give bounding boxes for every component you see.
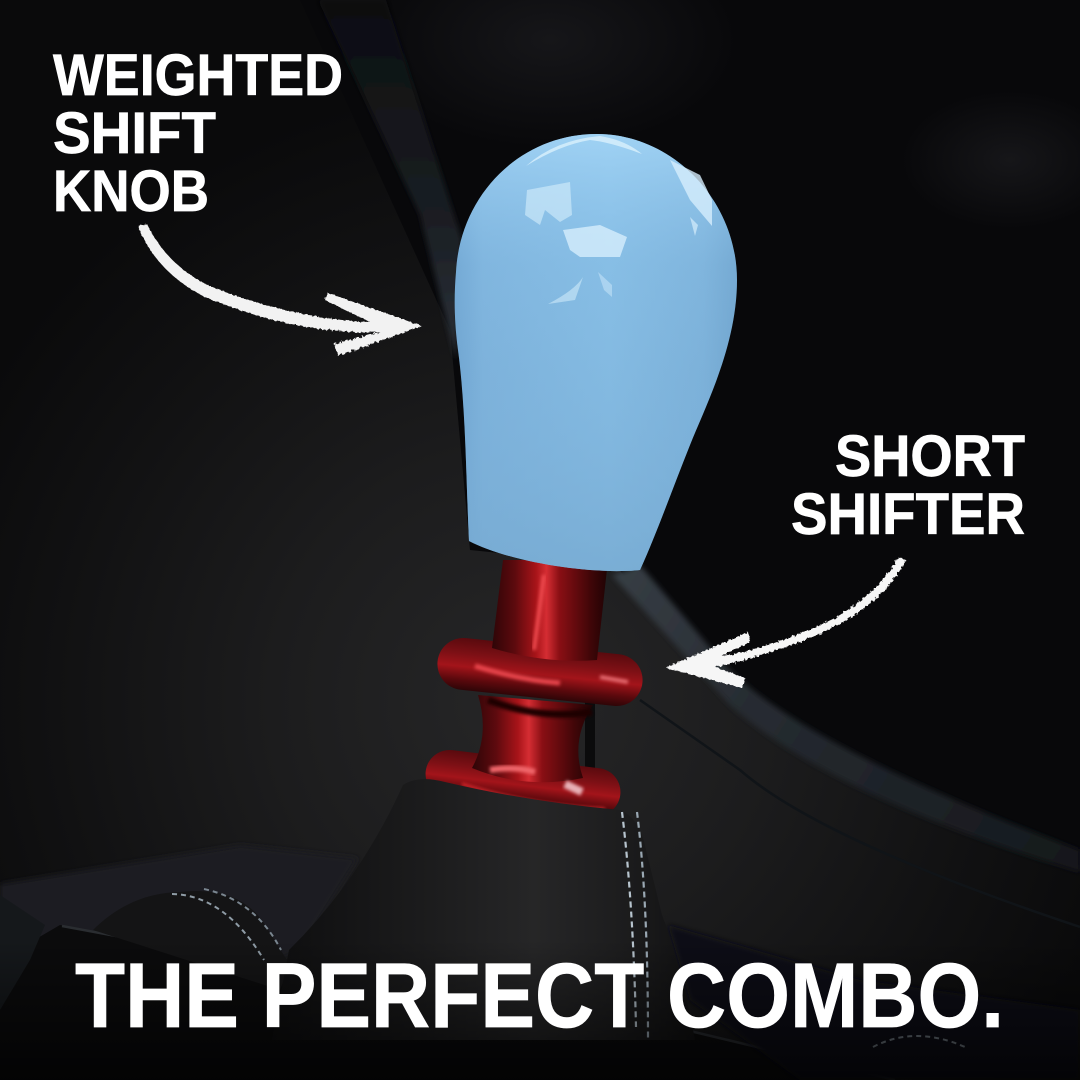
label: weighted shift knob [53,43,343,224]
bottom vignette [0,940,1080,1080]
label: weighted shift knob: KNOB [53,159,209,224]
knob highlights [525,136,712,304]
neck [472,695,593,782]
label: weighted shift knob: WEIGHTED [53,43,343,108]
shift boot [272,779,695,1040]
lower ring [423,747,623,819]
rear boot seam detail [93,889,965,1047]
arrow: to short shifter [666,557,906,688]
arrow: to shift knob [138,224,422,356]
label: weighted shift knob: SHIFT [53,101,216,166]
short shifter: red anodized shaft and rings [423,560,645,819]
upper ring [435,635,645,709]
label: short shifter: SHIFTER [791,482,1025,547]
label: short shifter: SHORT [835,424,1025,489]
label: short shifter [791,424,1025,547]
weighted shift knob [455,134,737,571]
shaft [492,560,608,661]
